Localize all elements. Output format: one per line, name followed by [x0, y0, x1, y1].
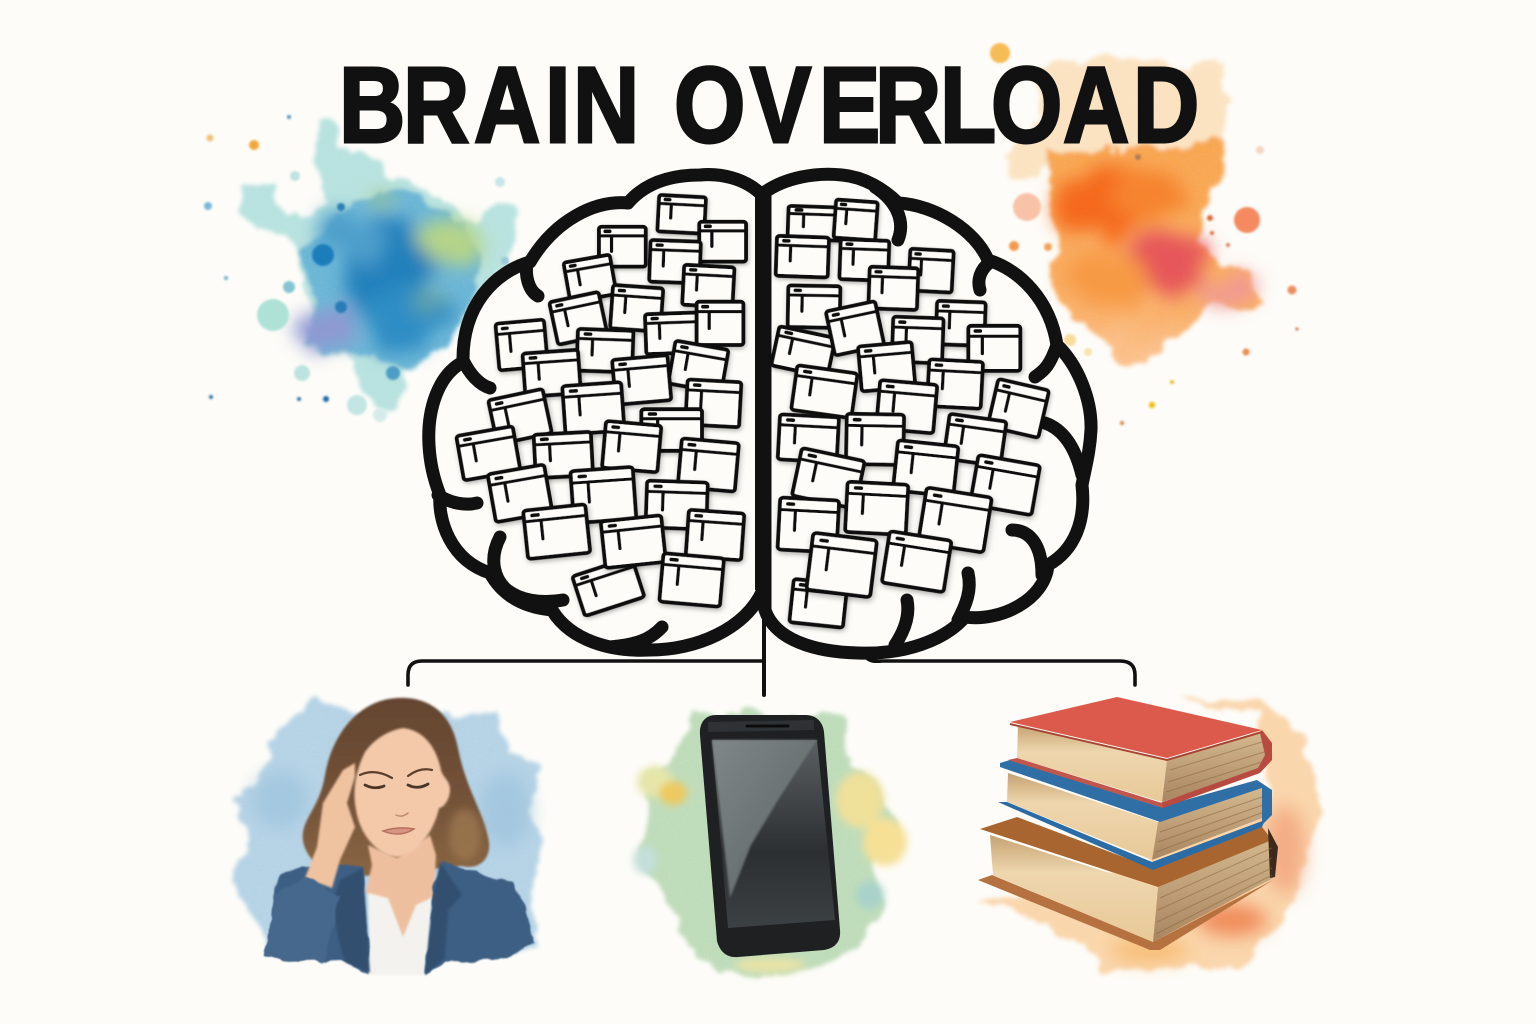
illustration: smartphone [633, 713, 907, 973]
orange wash behind books [980, 697, 1320, 973]
blue wash behind woman [233, 702, 545, 953]
title: BRAIN OVERLOAD [339, 45, 1199, 166]
watercolor splash: blue [204, 115, 520, 422]
hair [303, 698, 489, 878]
browser windows: right hemisphere [771, 200, 1049, 628]
browser windows: left hemisphere [456, 195, 746, 616]
face [354, 728, 450, 857]
neck [366, 835, 436, 938]
illustration: stack of books [978, 697, 1320, 973]
connector lines from brain to images [408, 590, 1135, 695]
sleeve [265, 878, 340, 962]
green and yellow wash behind phone [633, 713, 907, 973]
page edge lines [1156, 742, 1272, 934]
brain outline [429, 174, 1091, 653]
shirt [368, 893, 433, 975]
screen [712, 740, 835, 928]
middle blue book [998, 760, 1272, 870]
lapels [335, 862, 462, 975]
speaker [747, 724, 788, 728]
bottom brown book [978, 817, 1278, 950]
raised hand [305, 763, 355, 888]
illustration: stressed woman [233, 698, 545, 977]
blazer [265, 862, 535, 977]
phone body [700, 715, 840, 957]
top red book [1008, 697, 1272, 808]
watercolor splash: orange [990, 43, 1298, 425]
facial features [360, 769, 432, 834]
